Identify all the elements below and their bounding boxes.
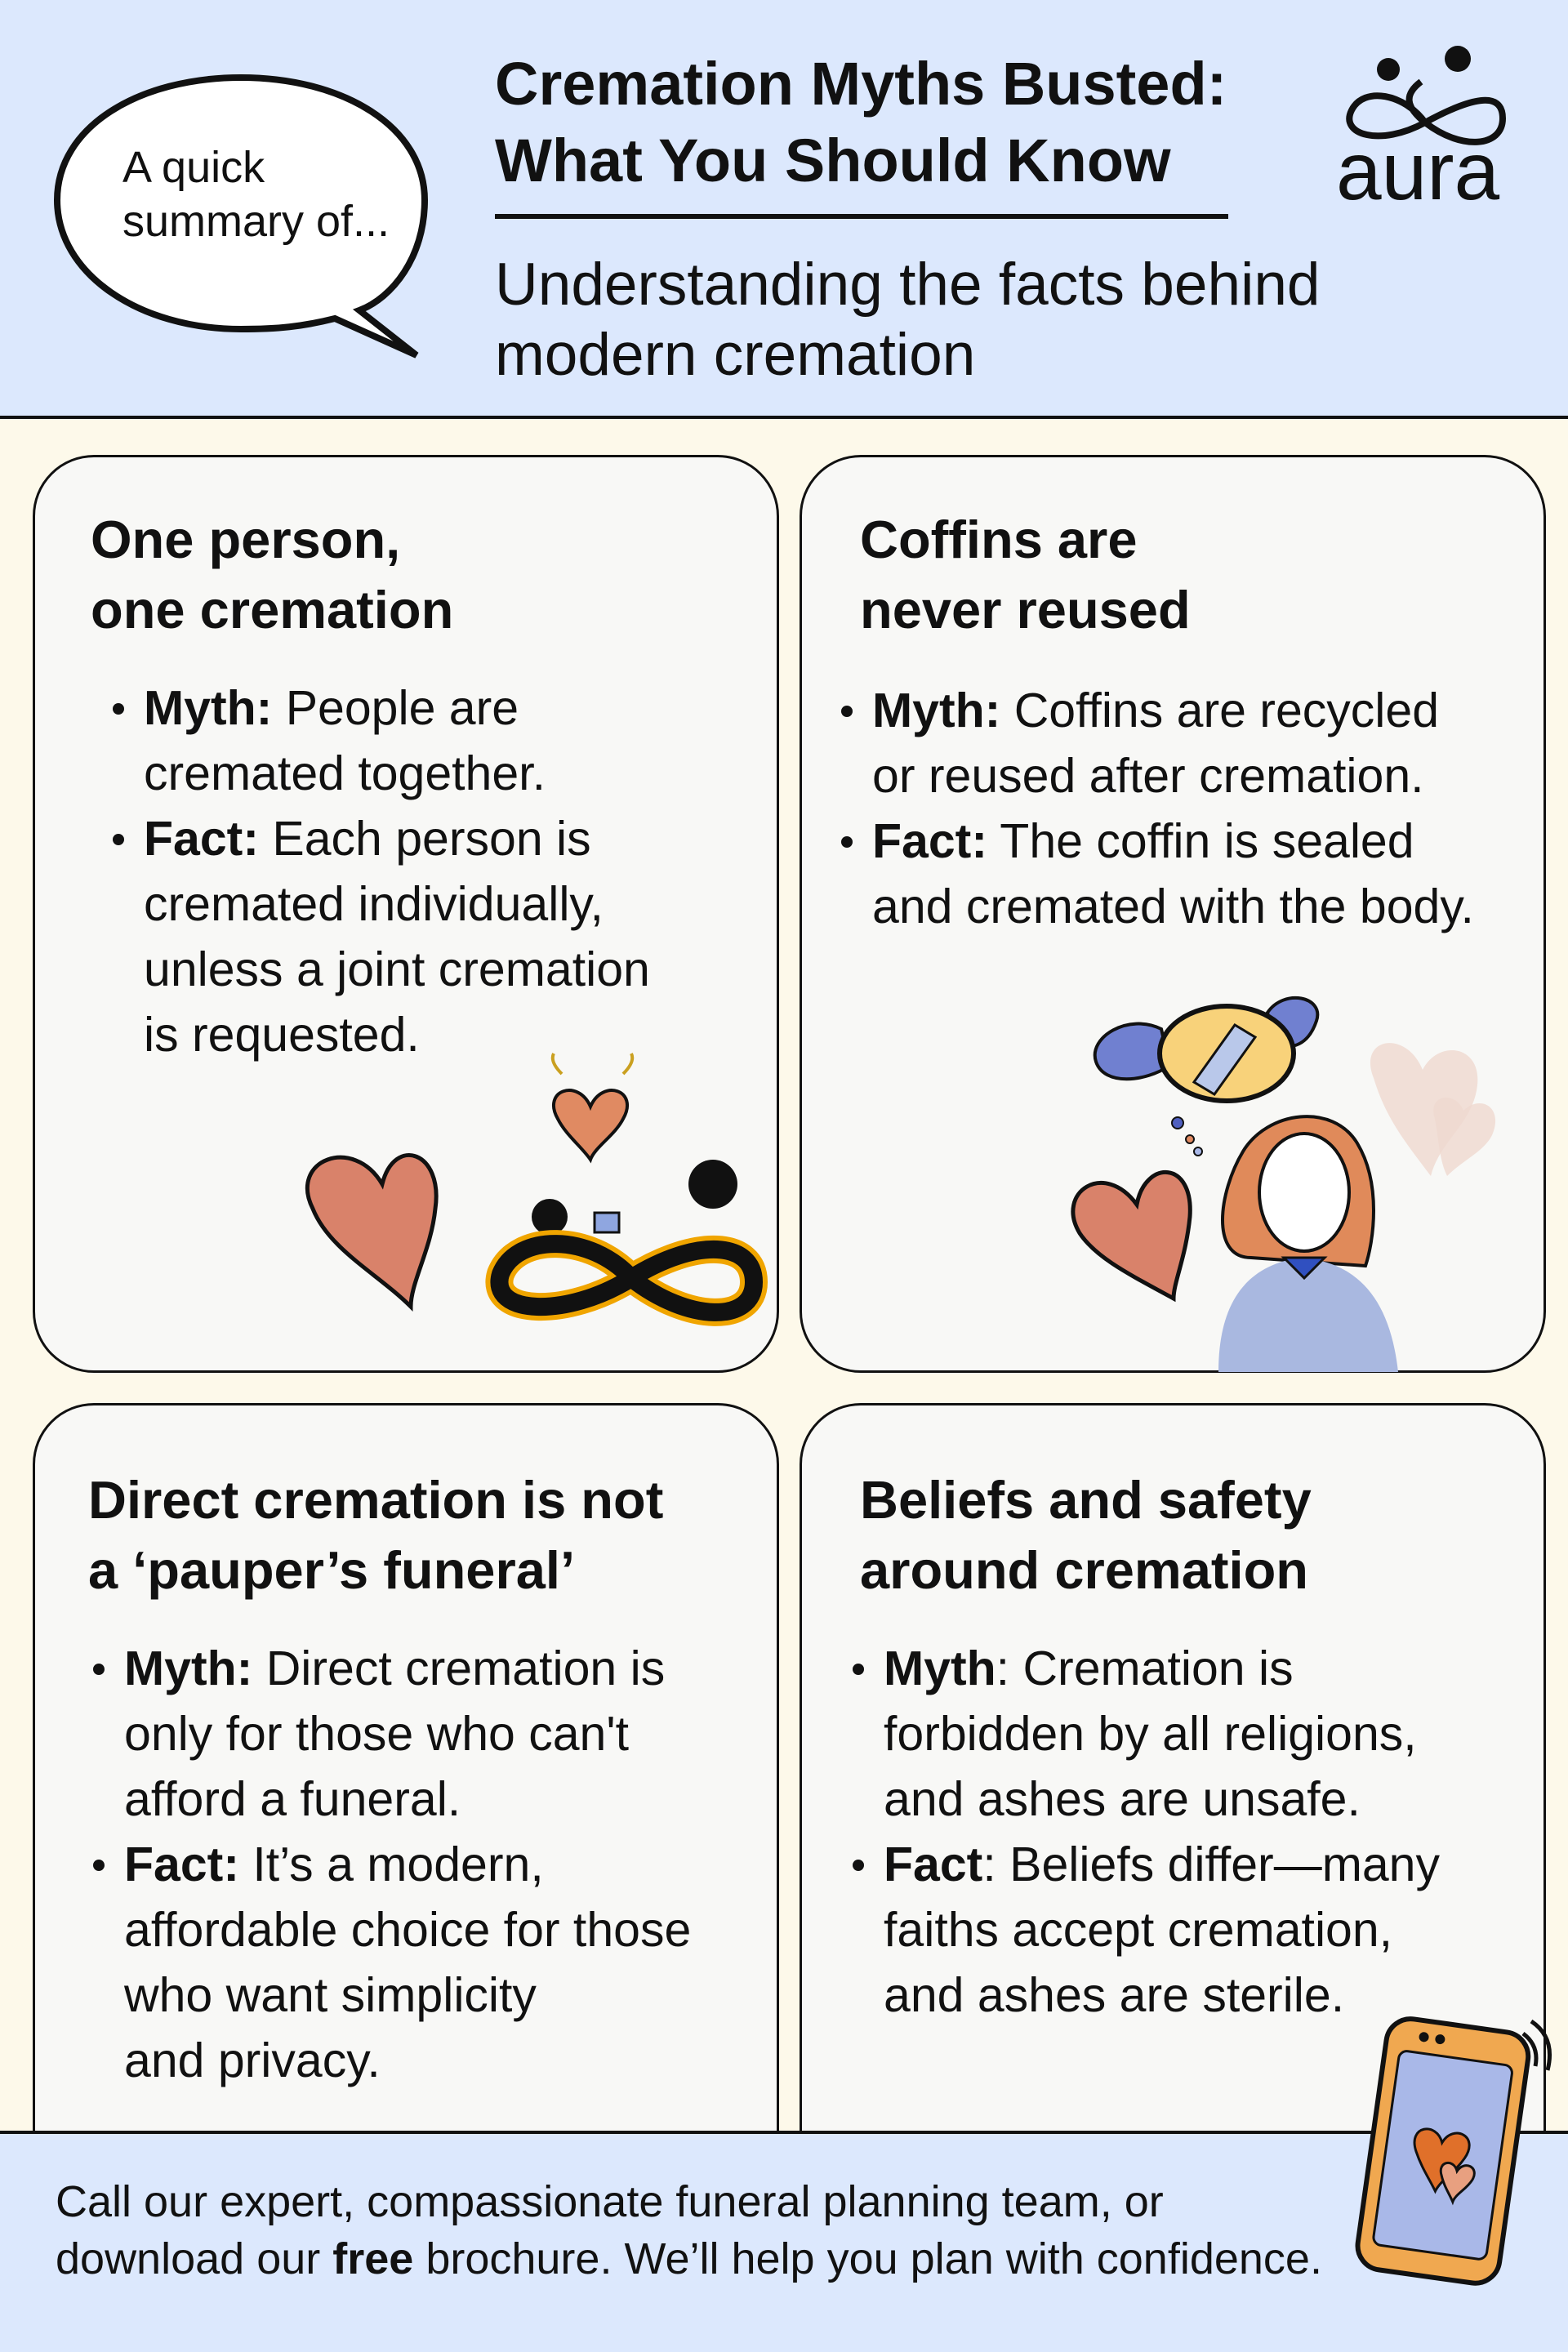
footer text: Call our expert, compassionate funeral planning team, or bbox=[56, 2177, 1164, 2226]
bullets: forbidden by all religions, bbox=[884, 1707, 1417, 1761]
bullets: and ashes are sterile. bbox=[884, 1968, 1344, 2022]
heading bbox=[860, 510, 1191, 639]
bullets: only for those who can't bbox=[124, 1707, 629, 1761]
header band bbox=[0, 0, 1568, 419]
bullets: and ashes are unsafe. bbox=[884, 1772, 1361, 1826]
panel: coffins never reused bbox=[800, 455, 1546, 1373]
heading: One person, bbox=[91, 510, 400, 569]
heading: Coffins are bbox=[860, 510, 1138, 569]
bullets: who want simplicity bbox=[124, 1968, 537, 2022]
heading: Beliefs and safety bbox=[860, 1470, 1312, 1530]
bullets: Myth: Coffins are recycled bbox=[872, 684, 1439, 737]
bullets bbox=[841, 684, 1474, 933]
heading: a ‘pauper’s funeral’ bbox=[88, 1540, 575, 1600]
heading: never reused bbox=[860, 580, 1191, 639]
heading: around cremation bbox=[860, 1540, 1308, 1600]
bullets: Myth: Cremation is bbox=[884, 1642, 1294, 1695]
title bbox=[495, 50, 1227, 194]
illustration: hearts and infinity bbox=[305, 1053, 768, 1326]
subtitle: Understanding the facts behind bbox=[495, 252, 1321, 318]
bullets: Fact: It’s a modern, bbox=[124, 1838, 544, 1891]
heading: Direct cremation is not bbox=[88, 1470, 663, 1530]
bullets: Fact: Beliefs differ—many bbox=[884, 1838, 1440, 1891]
panel: direct cremation bbox=[33, 1403, 779, 2220]
bullets bbox=[113, 681, 650, 1062]
heading bbox=[91, 510, 453, 639]
panel: one person one cremation bbox=[33, 455, 779, 1373]
bullets: Fact: The coffin is sealed bbox=[872, 814, 1414, 868]
bullets: cremated individually, bbox=[144, 877, 604, 931]
logo: aura bbox=[1336, 46, 1506, 217]
speech bubble text bbox=[122, 143, 390, 246]
bullets: faiths accept cremation, bbox=[884, 1903, 1392, 1957]
title: What You Should Know bbox=[495, 127, 1171, 194]
heading: one cremation bbox=[91, 580, 453, 639]
bullets: afford a funeral. bbox=[124, 1772, 461, 1826]
bullets: cremated together. bbox=[144, 746, 546, 800]
bullets: and privacy. bbox=[124, 2034, 381, 2087]
title: Cremation Myths Busted: bbox=[495, 50, 1227, 118]
subtitle: modern cremation bbox=[495, 322, 975, 388]
bullets: unless a joint cremation bbox=[144, 942, 650, 996]
bullets: affordable choice for those bbox=[124, 1903, 691, 1957]
title underline bbox=[495, 214, 1228, 219]
panel: beliefs and safety bbox=[800, 1403, 1546, 2220]
subtitle bbox=[495, 252, 1321, 388]
bullets bbox=[853, 1642, 1440, 2022]
speech bubble text: summary of... bbox=[122, 197, 390, 246]
speech bubble bbox=[54, 74, 428, 359]
footer text: download our free brochure. We’ll help you plan with confidence. bbox=[56, 2234, 1322, 2283]
bullets: or reused after cremation. bbox=[872, 749, 1424, 803]
speech bubble text: A quick bbox=[122, 143, 265, 192]
bullets: Fact: Each person is bbox=[144, 812, 591, 866]
bullets: is requested. bbox=[144, 1008, 420, 1062]
footer bbox=[0, 2131, 1568, 2352]
bullets: Myth: People are bbox=[144, 681, 519, 735]
heading bbox=[860, 1470, 1312, 1600]
illustration: woman thinking of coffin bbox=[1071, 996, 1495, 1372]
bullets: Myth: Direct cremation is bbox=[124, 1642, 665, 1695]
icon: phone bbox=[1356, 2016, 1552, 2286]
footer text bbox=[56, 2177, 1322, 2283]
bullets bbox=[93, 1642, 691, 2087]
heading bbox=[88, 1470, 663, 1600]
logo: aura: aura bbox=[1336, 126, 1499, 217]
bullets: and cremated with the body. bbox=[872, 880, 1474, 933]
